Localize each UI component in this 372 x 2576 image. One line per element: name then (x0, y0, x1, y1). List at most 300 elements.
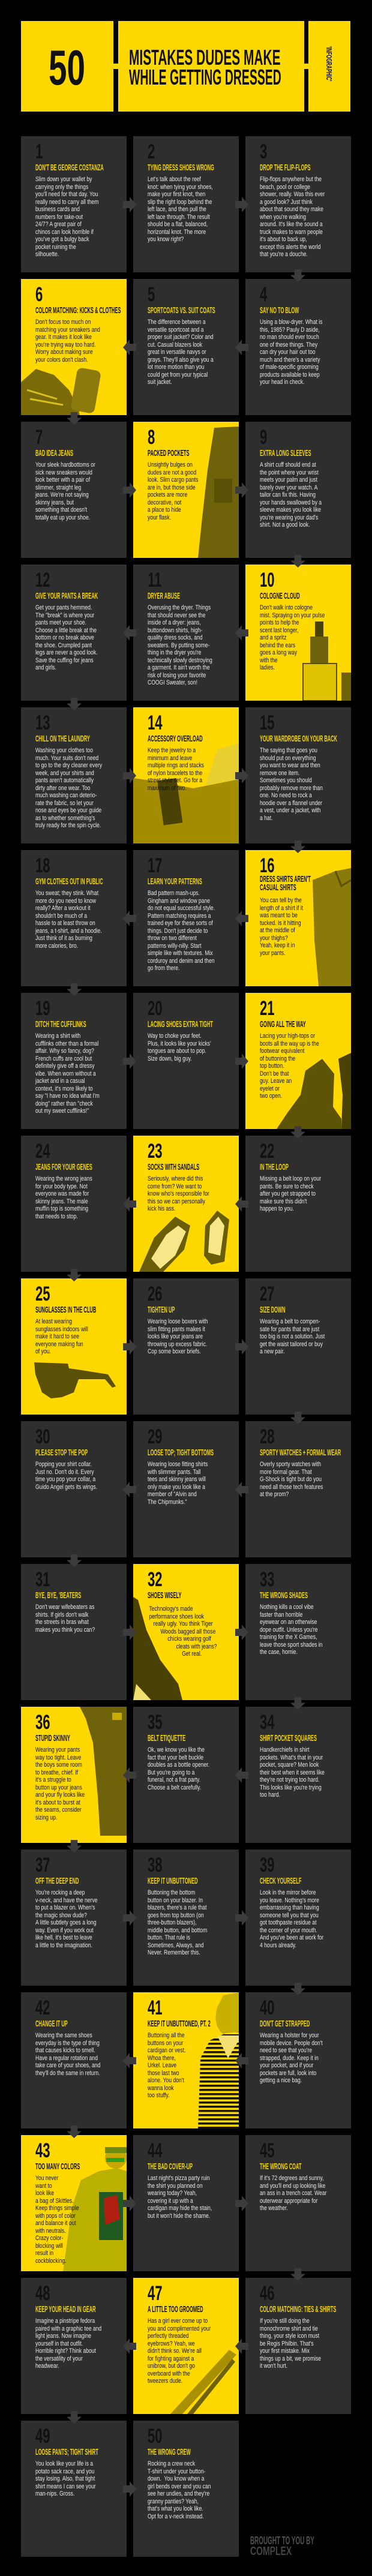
panel: 1: carrying only the things (35, 184, 88, 191)
panel: 24: 24 (35, 1140, 50, 1163)
panel: 9 (245, 422, 351, 558)
panel: 9: barely over your watch. A (260, 484, 317, 491)
panel: 34 (245, 1707, 351, 1843)
panel: 44: covering it up with a (148, 2197, 193, 2204)
panel: 10: scent last longer, (260, 626, 298, 634)
panel: 31: 31 (35, 1568, 50, 1591)
panel: 33: the case, homie. (260, 1649, 298, 1656)
panel: 2: make your first knot, then (148, 191, 205, 198)
panel: 35: BELT ETIQUETTE (148, 1733, 185, 1743)
panel: 11: buttondown shirts, high- (148, 626, 202, 634)
panel: 18: Just think of it as burning (35, 935, 92, 942)
panel: 30 (21, 1421, 127, 1557)
panel: 27: a new pair. (260, 1348, 284, 1355)
panel: 30: time you pop your collar, a (35, 1476, 95, 1483)
arrow: 48 down to 49 (67, 2411, 82, 2424)
panel: 46: COLOR MATCHING: TIES & SHIRTS (260, 2304, 336, 2314)
image: cargo pants (198, 427, 239, 558)
image: bracelets on wrist (133, 743, 239, 843)
panel: 4: this, 1985? Pauly D aside, (260, 326, 320, 334)
panel: 48: Horrible right? Think about (35, 2347, 96, 2355)
arrow: 19 to 20 (123, 1053, 136, 1069)
arrow: 23 to 24 (123, 1196, 136, 1212)
panel: 50: down. You know when a (148, 2475, 204, 2482)
panel: 38: middle button, and bottom (148, 1927, 207, 1934)
panel: 44: 44 (148, 2139, 163, 2162)
panel: 39: 39 (260, 1854, 275, 1877)
panel: 47: 47 (148, 2282, 163, 2305)
panel: 42: everyday is the type of thing (35, 2040, 100, 2047)
panel: 37: OFF THE DEEP END (35, 1876, 79, 1886)
panel: 37: like hell, it's best to leave (35, 1934, 92, 1941)
panel: 47: unibrow, but don't go (148, 2362, 195, 2370)
panel: 22: after you get strapped to (260, 1190, 316, 1197)
panel: 50: Opt for a v-neck instead. (148, 2512, 203, 2520)
panel: 19: DITCH THE CUFFLINKS (35, 1019, 86, 1029)
panel: 43: TOO MANY COLORS (35, 2161, 80, 2172)
panel: 38: Never. Remember this. (148, 1949, 200, 1956)
panel: 19: jacket and in a casual (35, 1077, 85, 1085)
panel: 47: Has a girl ever come up to (148, 2317, 208, 2325)
panel: 37 (21, 1850, 127, 1986)
panel: 37: the magic show dude? (35, 1911, 87, 1919)
panel: 16: length of a shirt if it (260, 905, 303, 912)
panel: 2: slip the right loop behind the (148, 198, 212, 205)
panel: 22 (245, 1136, 351, 1272)
panel: 19 (21, 993, 127, 1129)
arrow: 24 down to 25 (67, 1269, 82, 1281)
panel: 18: more do you need to know (35, 897, 96, 905)
panel: 4: one of these things. They (260, 341, 317, 348)
panel: 39: 4 hours already. (260, 1941, 296, 1948)
panel: 34: SHIRT POCKET SQUARES (260, 1733, 317, 1743)
panel: 10: Don't walk into cologne (260, 604, 313, 611)
panel: 49: LOOSE PANTS; TIGHT SHIRT (35, 2447, 98, 2457)
panel: 2: knot: when tying your shoes, (148, 184, 213, 191)
panel: 6: matching your sneakers and (35, 326, 100, 334)
panel: 38: button. That rule is (148, 1934, 190, 1941)
panel: 30: Guido Angel gets its wings. (35, 1483, 97, 1490)
panel: 49: potato sack race, and you (35, 2468, 94, 2475)
panel: 21: of buttoning the (260, 1055, 295, 1062)
panel: 15: probably remove more than (260, 785, 323, 792)
panel: 33: faster than horrible (260, 1611, 303, 1619)
panel: 28: more formal gear. That (260, 1469, 312, 1476)
panel: 21: boots all the way up is the (260, 1040, 319, 1047)
panel: 8: PACKED POCKETS (148, 448, 189, 458)
panel: 43: result in (35, 2250, 53, 2257)
panel: 25: of you. (35, 1348, 51, 1355)
arrow: 12 down to 13 (67, 698, 82, 710)
panel: 40: pockets are full, look into (260, 2070, 316, 2077)
panel: 4 (245, 279, 351, 415)
panel: 6: 6 (35, 283, 43, 306)
panel: 40: strapped, dude. Keep it in (260, 2054, 319, 2061)
panel: 13: truly ready for the spin cycle. (35, 822, 101, 829)
panel: 2: left lace through. The result (148, 214, 210, 221)
panel: 46: things up a bit, we promise (260, 2355, 321, 2362)
panel: 31: the streets in bras what (35, 1619, 89, 1626)
panel: 41: those last two (148, 2070, 179, 2077)
panel: 47: eyebrows? Yeah, we (148, 2340, 195, 2347)
panel: 22: 22 (260, 1140, 275, 1163)
panel: 48: KEEP YOUR HEAD IN GEAR (35, 2304, 96, 2314)
panel: 36: the seams, consider (35, 1806, 82, 1814)
panel: 43: with pops of color (35, 2212, 76, 2220)
panel: 10: goes a long way (260, 649, 297, 656)
panel: 35: Ok, we know you like the (148, 1746, 205, 1754)
panel: 46: your first mistake. Mix (260, 2347, 310, 2355)
panel: 10: ladies. (260, 664, 275, 671)
panel: 18: really? After a workout it (35, 905, 91, 912)
panel: 21: guy. Leave an (260, 1077, 292, 1085)
panel: 14: minimum and leave (148, 755, 192, 762)
panel: 3: shower, really. Was this ever (260, 191, 325, 198)
panel: 41: cardigan or vest. (148, 2047, 185, 2054)
panel: 13: rate the fabric, so let your (35, 799, 94, 806)
arrow: 9 down to 10 (290, 555, 305, 568)
panel: 43: and balance it out (35, 2220, 76, 2227)
arrow: 11 to 12 (123, 625, 136, 641)
panel: 3: DROP THE FLIP-FLOPS (260, 163, 310, 173)
panel: 45: THE WRONG COAT (260, 2161, 301, 2172)
panel: 4: 4 (260, 283, 267, 306)
panel: 38: goes from top button (on (148, 1911, 203, 1919)
panel: 20 (133, 993, 239, 1129)
panel: 30: 30 (35, 1425, 50, 1448)
panel: 28: 28 (260, 1425, 275, 1448)
panel: 40 (245, 1992, 351, 2128)
panel: 6: you're trying way too hard. (35, 341, 95, 348)
panel: 19: say "I have no idea what I'm (35, 1092, 100, 1100)
panel: 4: your head in check. (260, 379, 304, 386)
panel: 4: can dry your hair out too (260, 349, 316, 356)
panel: 7 (21, 422, 127, 558)
panel: 5: cut. Casual blazers look (148, 341, 202, 348)
panel: 39: Look in the mirror before (260, 1889, 316, 1896)
panel: 21 (245, 993, 351, 1129)
panel: 10: COLOGNE CLOUD (260, 591, 300, 601)
panel: 15: should put on everything (260, 755, 316, 762)
panel: 11: that should never see the (148, 612, 205, 619)
panel: 26: slim fitting pants makes it (148, 1326, 205, 1333)
arrow: 17 to 18 (123, 911, 136, 926)
panel: 26: Wearing loose boxers with (148, 1318, 208, 1325)
panel: 36: it's a struggle to (35, 1776, 71, 1784)
panel: 19: 19 (35, 997, 50, 1020)
panel: 10: 10 (260, 569, 275, 592)
panel: 47: perfectly threaded (148, 2332, 189, 2340)
panel: 28: G-Shock is tight but do you (260, 1476, 322, 1483)
panel: 13: week, and your shirts and (35, 769, 94, 776)
panel: 3: about that sound they make (260, 206, 323, 213)
panel: 3: a good look? Just think (260, 198, 313, 205)
panel: 42: Wearing the same shoes (35, 2032, 92, 2039)
panel: 9: shirt. Not a good look. (260, 521, 310, 529)
panel: 20: Way to choke your feet. (148, 1032, 202, 1040)
panel: 40: your pocket, and if your (260, 2062, 313, 2069)
panel: 23: SOCKS WITH SANDALS (148, 1162, 199, 1172)
panel: 27: too big is not a solution. Just (260, 1333, 325, 1340)
panel: 17: throw on two different (148, 935, 197, 942)
panel: 1: pocket ruining the (35, 244, 76, 251)
panel: 36: way too tight. Leave (35, 1754, 81, 1761)
panel: 3: it's about to back up, (260, 236, 307, 243)
panel: 38: blazers, there's a rule that (148, 1904, 206, 1911)
panel: 27: 27 (260, 1283, 275, 1305)
panel: 39: you leave. Nothing's more (260, 1897, 319, 1904)
panel: 18 (21, 850, 127, 986)
panel: 26: throwing up excess fabric. (148, 1340, 207, 1347)
panel: 35 (133, 1707, 239, 1843)
arrow: 41 to 42 (123, 2053, 136, 2068)
panel: 18: more calories, bro. (35, 942, 78, 949)
panel: 13: 13 (35, 711, 50, 734)
panel: 36: sizing up. (35, 1814, 57, 1821)
arrow: 46 to 47 (235, 2338, 248, 2354)
panel: 1: silhouette. (35, 251, 59, 258)
panel: 15: one. No need to rock a (260, 792, 312, 799)
panel: 42: 42 (35, 1996, 50, 2019)
panel: 1: 1 (35, 140, 43, 163)
panel: 30: Just no. Don't do it. Every (35, 1469, 94, 1476)
image: tweezers (170, 2350, 236, 2414)
panel: 47: tweezers dude. (148, 2377, 182, 2385)
arrow: 32 to 33 (235, 1625, 248, 1640)
panel: 8: pockets are more (148, 491, 187, 499)
panel: 24: skinny jeans. The male (35, 1197, 88, 1205)
panel: 2 (133, 136, 239, 272)
panel: 17: 17 (148, 854, 163, 877)
panel: 43: Keep things simple (35, 2205, 79, 2212)
panel: 47: overboard with the (148, 2370, 190, 2377)
panel: 35: But you're going to a (148, 1769, 194, 1776)
panel: 47: A LITTLE TOO GROOMED (148, 2304, 203, 2314)
panel: 8 (133, 422, 239, 558)
panel: 16 (245, 850, 351, 986)
panel: 35: Choose a belt carefully. (148, 1784, 201, 1791)
panel: 2: left lace, and then pull the (148, 206, 206, 213)
panel: 9: meets your palm and just (260, 476, 317, 484)
header box: 50: 50 (49, 40, 85, 95)
arrow: 8 to 9 (235, 482, 248, 498)
panel: 16: tucked. Is it hitting (260, 919, 301, 926)
panel: 6: gear. It makes it look like (35, 334, 92, 341)
panel: 28: Overly sporty watches with (260, 1461, 321, 1468)
panel: 36: and your fly looks like (35, 1791, 85, 1799)
panel: 15: Sometimes you should (260, 777, 312, 784)
panel: 43: 43 (35, 2139, 50, 2162)
panel: 48 (21, 2278, 127, 2414)
panel: 13: Washing your clothes too (35, 747, 93, 754)
panel: 47: you and complimented your (148, 2325, 211, 2332)
panel: 44: but it won't hide the shame. (148, 2212, 210, 2220)
panel: 33: training for the X Games, (260, 1634, 317, 1641)
panel: 40: Wearing a holster for your (260, 2032, 319, 2039)
panel: 6: your colors don't clash. (35, 356, 88, 364)
panel: 13: dirty after one wear. Too (35, 785, 90, 792)
branding: brought to you by Complex: BROUGHT TO YOU BY (250, 2535, 314, 2547)
panel: 33: 33 (260, 1568, 275, 1591)
panel: 46: thing, your style icon must (260, 2332, 319, 2340)
panel: 43: with neutrals. (35, 2227, 66, 2234)
panel: 17: simple like with textures. Mix (148, 950, 213, 957)
panel: 7: Your sleek hardbottoms or (35, 461, 95, 469)
panel: 14: 14 (148, 711, 163, 734)
arrow: 33 down to 34 (290, 1697, 305, 1710)
panel: 28 (245, 1421, 351, 1557)
panel: 9: EXTRA LONG SLEEVES (260, 448, 311, 458)
panel: 8: dudes are not a good (148, 469, 196, 476)
panel: 42 (21, 1992, 127, 2128)
panel: 14 (133, 707, 239, 843)
panel: 46: it won't hurt. (260, 2362, 287, 2370)
header box: title (118, 21, 304, 112)
panel: 14: maximum of two. (148, 785, 187, 792)
arrow: 22 to 23 (235, 1196, 248, 1212)
panel: 19: out my sweet cufflinks!" (35, 1107, 89, 1115)
panel: 34: pockets. What's that in your (260, 1754, 323, 1761)
header box: infographic tag (308, 21, 350, 112)
panel: 14: ACCESSORY OVERLOAD (148, 734, 203, 744)
panel: 29: The Chipmunks." (148, 1499, 187, 1506)
panel: 24: muffin top is something (35, 1205, 88, 1212)
panel: 38: button on your blazer. In (148, 1897, 203, 1904)
panel: 26 (133, 1278, 239, 1415)
panel: 10: points to help the (260, 619, 299, 626)
arrow: 49 to 50 (123, 2481, 136, 2497)
image: socks with sandals (139, 1211, 229, 1272)
panel: 12: The "break" is where your (35, 612, 94, 619)
panel: 11: 11 (148, 569, 161, 592)
panel: 29: tees and skinny jeans will (148, 1476, 206, 1483)
panel: 12 (21, 565, 127, 701)
panel: 17: Gingham and window pane (148, 897, 210, 905)
panel: 18: jeans, a t-shirt, and a hoodie. (35, 927, 102, 935)
panel: 15: you want to wear and then (260, 762, 320, 769)
panel: 48: yourself in that outfit. (35, 2340, 83, 2347)
panel: 19: cufflinks other than a formal (35, 1040, 98, 1047)
panel: 35: 35 (148, 1711, 163, 1734)
panel: 45 (245, 2135, 351, 2271)
panel: 28: at the prom? (260, 1491, 289, 1498)
panel: 49: You look like your life is a (35, 2460, 93, 2467)
panel: 39 (245, 1850, 351, 1986)
panel: 7: totally eat up your shoe. (35, 514, 90, 521)
panel: 6 (21, 279, 127, 415)
panel: 5: 5 (148, 283, 155, 306)
panel: 1: numbers for take-out (35, 214, 83, 221)
panel: 19: affair. Why so fancy, dog? (35, 1047, 94, 1055)
panel: 30: PLEASE STOP THE POP (35, 1448, 88, 1458)
panel: 18: GYM CLOTHES OUT IN PUBLIC (35, 876, 103, 887)
panel: 11: Overusing the dryer. Things (148, 604, 211, 611)
panel: 40: need to see that you're (260, 2047, 312, 2054)
arrow: 6 down to 7 (67, 412, 82, 425)
panel: 42: take care of your shoes, and (35, 2062, 100, 2069)
arrow: 21 down to 22 (290, 1126, 305, 1139)
arrow: 14 to 15 (235, 768, 248, 783)
panel: 17: do not equal successful style. (148, 905, 215, 912)
panel: 14: street style set. Go for a (148, 777, 202, 784)
header box: title: WHILE GETTING DRESSED (129, 65, 281, 89)
arrow: 37 to 38 (123, 1910, 136, 1926)
panel: 39: embarrassing than having (260, 1904, 319, 1911)
panel: 4: products available to keep (260, 371, 320, 378)
panel: 13: much washing can deterio- (35, 792, 97, 799)
panel: 12: Save the cuffing for jeans (35, 656, 94, 663)
panel: 12: 12 (35, 569, 50, 592)
panel: 19: Wearing a shirt with (35, 1032, 80, 1040)
panel: 3: Flip-flops anywhere but the (260, 176, 322, 183)
panel: 43: a bag of Skittles. (35, 2197, 73, 2204)
panel: 21: eyelet or (260, 1085, 280, 1092)
panel: 50: T-shirt under your button- (148, 2468, 205, 2475)
panel: 4: much and there's a variety (260, 356, 320, 364)
arrow: 36 down to 37 (67, 1840, 82, 1853)
panel: 43 (21, 2135, 127, 2271)
panel: 10: and a spritz (260, 634, 286, 641)
panel: 8: a place to hide (148, 506, 181, 514)
panel: 12: GIVE YOUR PANTS A BREAK (35, 591, 98, 601)
panel: 42: that causes kicks to smell. (35, 2047, 95, 2054)
arrow: 35 to 36 (123, 1767, 136, 1783)
panel: 3: that you're a douche. (260, 251, 308, 258)
panel: 7: look better with a pair of (35, 476, 90, 484)
arrow: 10 to 11 (235, 625, 248, 641)
panel: 8: look. Slim cargo pants (148, 476, 198, 484)
panel: 21: two open. (260, 1092, 282, 1100)
panel: 42: CHANGE IT UP (35, 2019, 68, 2029)
panel: 3: except this alerts the world (260, 244, 321, 251)
panel: 36: the boys some room (35, 1761, 82, 1769)
panel: 13: to go to the dry cleaner every (35, 762, 102, 769)
panel: 6: COLOR MATCHING: KICKS & CLOTHES (35, 305, 121, 316)
panel: 17: trained eye for these sorts of (148, 920, 213, 927)
panel: 10: with the (260, 656, 278, 663)
panel: 18: shouldn't be much of a (35, 912, 87, 919)
panel: 41: Urkel. Leave (148, 2062, 176, 2069)
panel: 15: remove one item. (260, 769, 299, 776)
panel: 16: your pants. (260, 949, 285, 956)
arrow: 7 to 8 (123, 482, 136, 498)
panel: 48: light jeans. Now imagine (35, 2332, 91, 2340)
panel: 43: look like (35, 2190, 54, 2197)
panel: 32: really ugly. You think Tiger (154, 1620, 213, 1628)
panel: 25: sunglasses indoors will (35, 1326, 88, 1333)
panel: 26: looks like your jeans are (148, 1333, 203, 1340)
image: man in striped cardigan (198, 1992, 239, 2128)
panel: 32 (133, 1564, 239, 1700)
panel: 12: legs are never a good look. (35, 649, 98, 656)
panel: 49: shirt means I can see your (35, 2482, 96, 2490)
branding: brought to you by Complex: COMPLEX (250, 2545, 292, 2558)
panel: 11: DRYER ABUSE (148, 591, 180, 601)
panel: 7: skinny jeans, but (35, 499, 74, 506)
arrow: 3 down to 4 (290, 269, 305, 282)
panel: 16: 16 (260, 854, 275, 877)
panel: 20: LACING SHOES EXTRA TIGHT (148, 1019, 213, 1029)
panel: 29: Wearing loose fitting shirts (148, 1461, 208, 1468)
panel: 23: know who's responsible for (148, 1190, 209, 1197)
panel: 31: shirts. If girls don't walk (35, 1611, 88, 1619)
panel: 41: Buttoning all the (148, 2032, 185, 2039)
panel: 26: 26 (148, 1283, 163, 1305)
panel: 1: DON'T BE GEORGE COSTANZA (35, 163, 104, 173)
panel: 19: vibe. When worn without a (35, 1070, 96, 1077)
panel: 32: cleats with jeans? (176, 1643, 217, 1650)
panel: 42: they'll do the same in return. (35, 2070, 100, 2077)
